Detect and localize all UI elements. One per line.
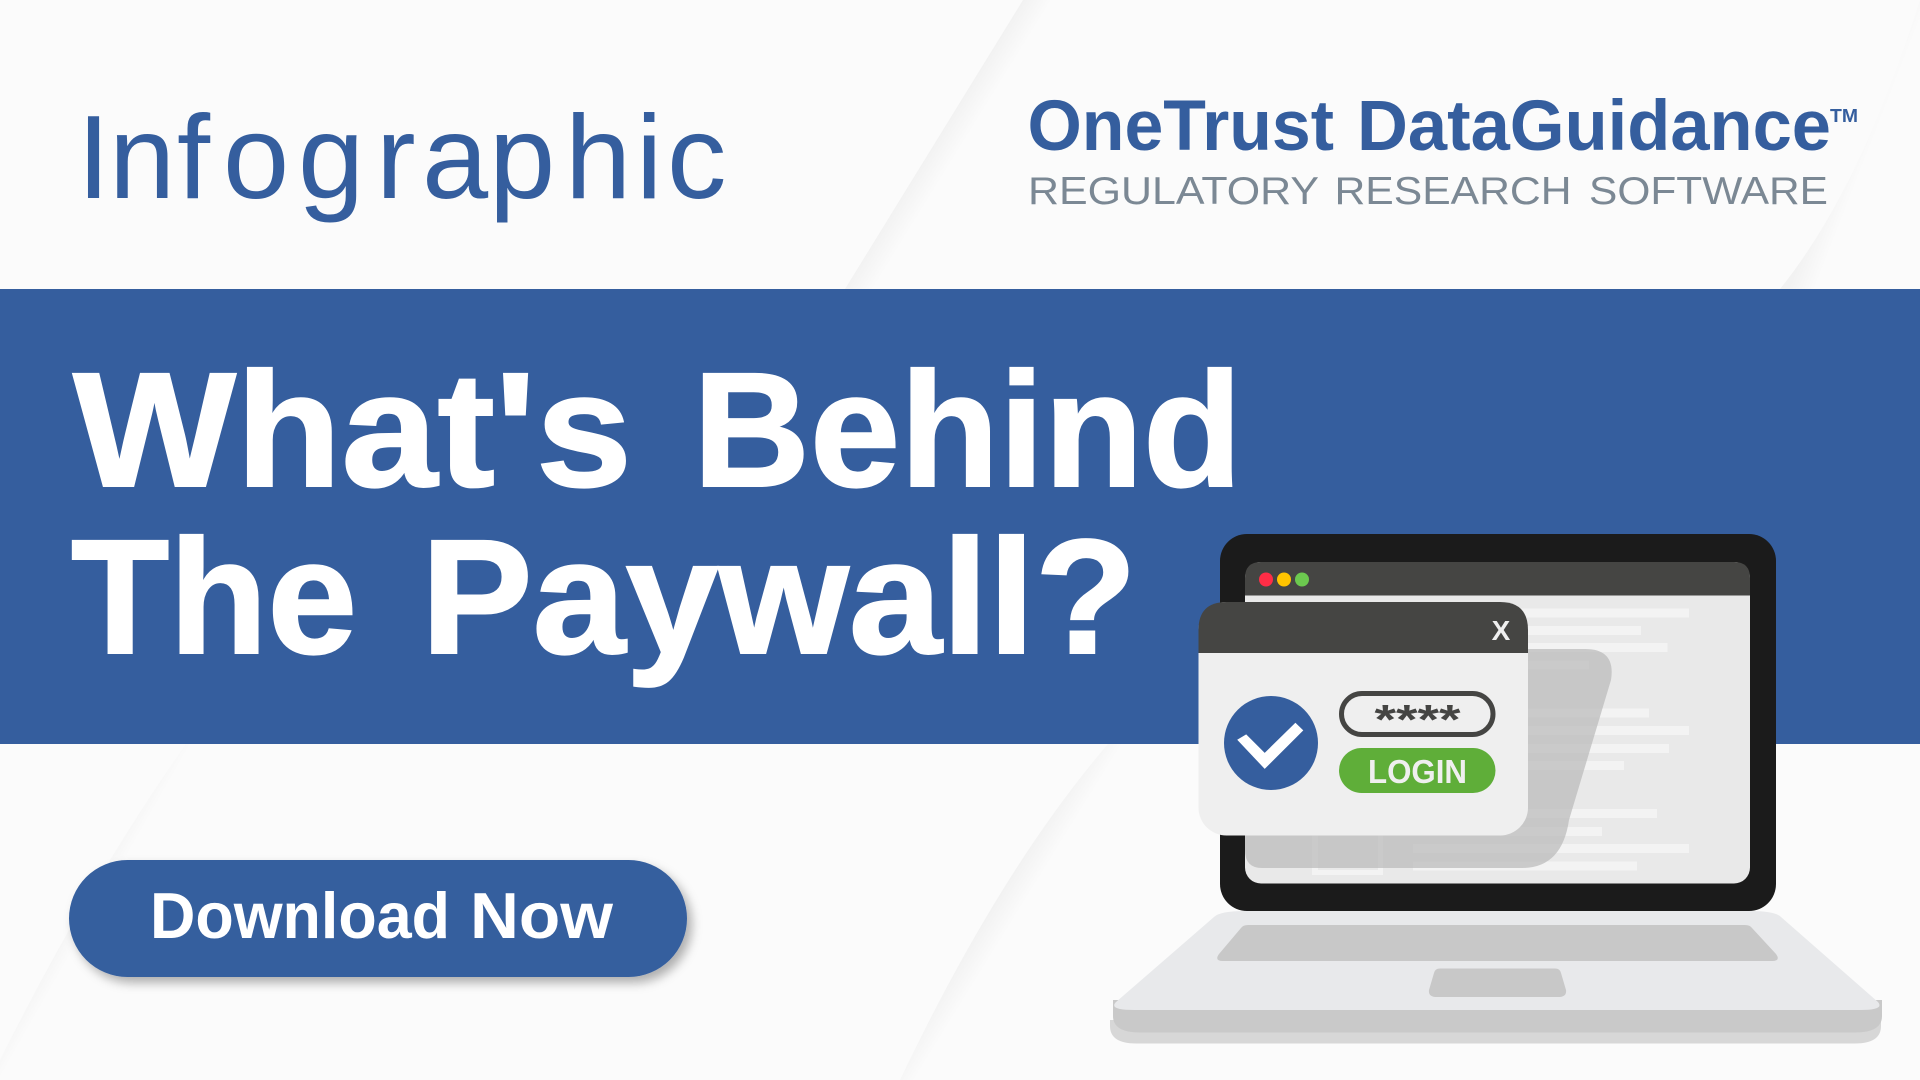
logo wordmark: DataGuidance [1357,87,1831,166]
trackpad [1429,968,1566,997]
title line 2 [71,505,1137,688]
logo tagline: RESEARCH [1334,170,1572,213]
button label: Now [470,879,613,952]
laptop screen [1245,562,1750,884]
logo tagline: SOFTWARE [1589,170,1828,213]
download button [69,860,687,977]
browser window dots [1259,572,1309,586]
window body [1198,602,1528,836]
blue title band [0,289,1920,744]
logo wordmark [1028,87,1831,166]
logo tagline [1028,170,1828,213]
browser title bar [1245,562,1750,596]
heading: Infographic: Infographic [77,91,726,224]
login button: LOGIN [1368,753,1467,790]
title line 2: Paywall? [421,505,1137,688]
logo wordmark: OneTrust [1028,87,1334,166]
login button [1339,748,1496,793]
title line 1 [73,338,1242,521]
login window shadow [1245,649,1612,868]
password field [1342,694,1493,743]
password field: **** [1374,696,1461,743]
laptop bezel [1220,534,1776,911]
laptop base shadow layer [1110,1020,1881,1044]
title line 1: Behind [693,338,1242,521]
title line 2: The [71,505,357,688]
login window [1198,602,1528,836]
button label [150,879,613,952]
button pill [69,860,687,977]
main title [71,338,1242,688]
laptop illustration [1110,534,1882,1044]
button label: Download [150,879,450,952]
page content lines [1312,608,1689,875]
close X: X [1492,615,1511,646]
logo: OneTrust DataGuidance [1028,87,1858,213]
laptop deck [1114,911,1880,1010]
trademark symbol: TM [1830,106,1858,126]
title line 1: What's [73,338,632,521]
window title bar [1198,602,1528,653]
logo tagline: REGULATORY [1028,170,1319,213]
keyboard [1217,925,1778,961]
check badge [1224,696,1318,790]
laptop base side [1113,1000,1882,1032]
